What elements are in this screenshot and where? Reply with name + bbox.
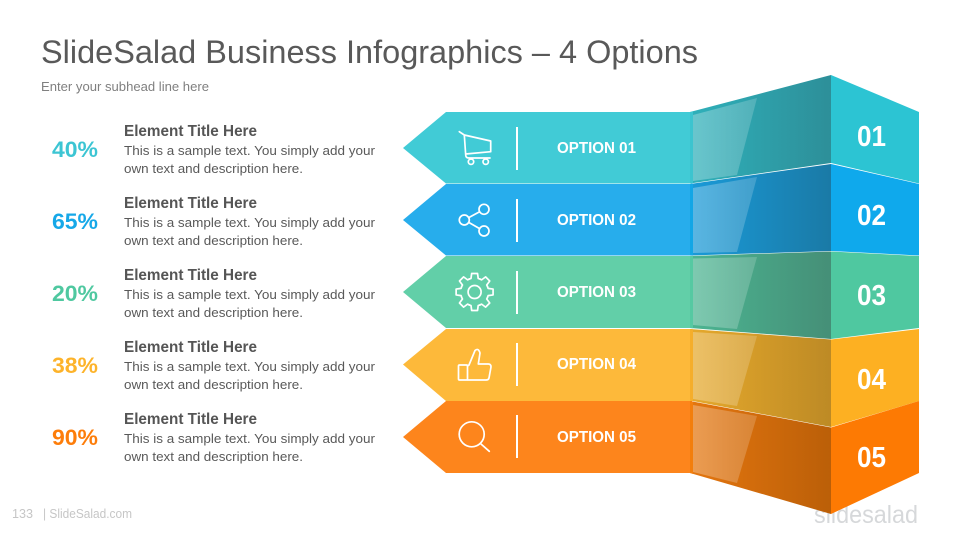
3D block segment 2: [690, 164, 919, 256]
title: SlideSalad Business Infographics – 4 Options: [41, 34, 698, 70]
left edge 2: [690, 184, 693, 256]
divider 3: [516, 271, 518, 314]
icon: thumbs up: [458, 349, 491, 380]
number 04: 04: [857, 364, 886, 396]
option label 5: OPTION 05: [557, 429, 636, 446]
description 3: This is a sample text. You simply add your: [124, 287, 376, 302]
element row 2: [52, 195, 376, 248]
element title 4: Element Title Here: [124, 339, 257, 356]
description 5: This is a sample text. You simply add your: [124, 431, 376, 446]
glass highlight 5: [693, 405, 757, 483]
watermark logo: slidesalad: [814, 501, 918, 529]
divider 4: [516, 343, 518, 386]
arrow shape 1: [403, 112, 692, 184]
3D block segment 4: [690, 329, 919, 427]
left face 2: [690, 164, 831, 256]
option 5 banner: [403, 401, 692, 473]
right face 2: [831, 164, 919, 256]
element row 4: [52, 339, 376, 392]
arrow shape 5: [403, 401, 692, 473]
number 01: 01: [857, 121, 886, 153]
number 05: 05: [857, 442, 886, 474]
description 2: own text and description here.: [124, 233, 303, 248]
description 1: This is a sample text. You simply add your: [124, 143, 376, 158]
description 4: own text and description here.: [124, 377, 303, 392]
right face 5: [831, 401, 919, 514]
number 02: 02: [857, 200, 886, 232]
option label 2: OPTION 02: [557, 212, 636, 229]
footer brand: | SlideSalad.com: [43, 507, 132, 521]
option label 3: OPTION 03: [557, 284, 636, 301]
left edge 5: [690, 401, 693, 474]
arrow shape 4: [403, 329, 692, 401]
description 2: This is a sample text. You simply add your: [124, 215, 376, 230]
glass highlight 2: [693, 177, 757, 253]
description 5: own text and description here.: [124, 449, 303, 464]
left face 3: [690, 252, 831, 339]
arrow shape 2: [403, 184, 692, 256]
option 3 banner: [403, 256, 692, 328]
option label 4: OPTION 04: [557, 356, 636, 373]
right face 3: [831, 252, 919, 339]
left edge 4: [690, 329, 693, 401]
3D block segment 5: [690, 401, 919, 514]
glass highlight 3: [693, 257, 757, 329]
left face 1: [690, 75, 831, 184]
percentage 40%: 40%: [52, 137, 98, 162]
element row 3: [52, 267, 376, 320]
percentage 38%: 38%: [52, 353, 98, 378]
footer page number: 133: [12, 507, 33, 521]
element row 5: [52, 411, 376, 464]
percentage 20%: 20%: [52, 281, 98, 306]
option 1 banner: [403, 112, 692, 184]
option 4 banner: [403, 329, 692, 401]
3D block segment 1: [690, 75, 919, 184]
element title 1: Element Title Here: [124, 123, 257, 140]
icon: gear: [456, 274, 493, 310]
element title 2: Element Title Here: [124, 195, 257, 212]
percentage 90%: 90%: [52, 425, 98, 450]
divider 2: [516, 199, 518, 242]
right face 4: [831, 329, 919, 427]
left edge 3: [690, 256, 693, 328]
subhead: Enter your subhead line here: [41, 79, 209, 94]
icon: shopping cart: [459, 132, 491, 164]
number 03: 03: [857, 280, 886, 312]
divider 1: [516, 127, 518, 170]
glass highlight 1: [693, 98, 757, 181]
icon: magnifier: [459, 422, 489, 451]
element title 5: Element Title Here: [124, 411, 257, 428]
element title 3: Element Title Here: [124, 267, 257, 284]
description 4: This is a sample text. You simply add your: [124, 359, 376, 374]
description 3: own text and description here.: [124, 305, 303, 320]
description 1: own text and description here.: [124, 161, 303, 176]
option label 1: OPTION 01: [557, 140, 636, 157]
left face 4: [690, 329, 831, 427]
percentage 65%: 65%: [52, 209, 98, 234]
arrow shape 3: [403, 256, 692, 328]
right face 1: [831, 75, 919, 184]
left face 5: [690, 401, 831, 514]
icon: share: [459, 204, 489, 236]
element row 1: [52, 123, 376, 176]
option 2 banner: [403, 184, 692, 256]
glass highlight 4: [693, 332, 757, 406]
divider 5: [516, 415, 518, 458]
3D block segment 3: [690, 252, 919, 339]
left edge 1: [690, 111, 693, 184]
